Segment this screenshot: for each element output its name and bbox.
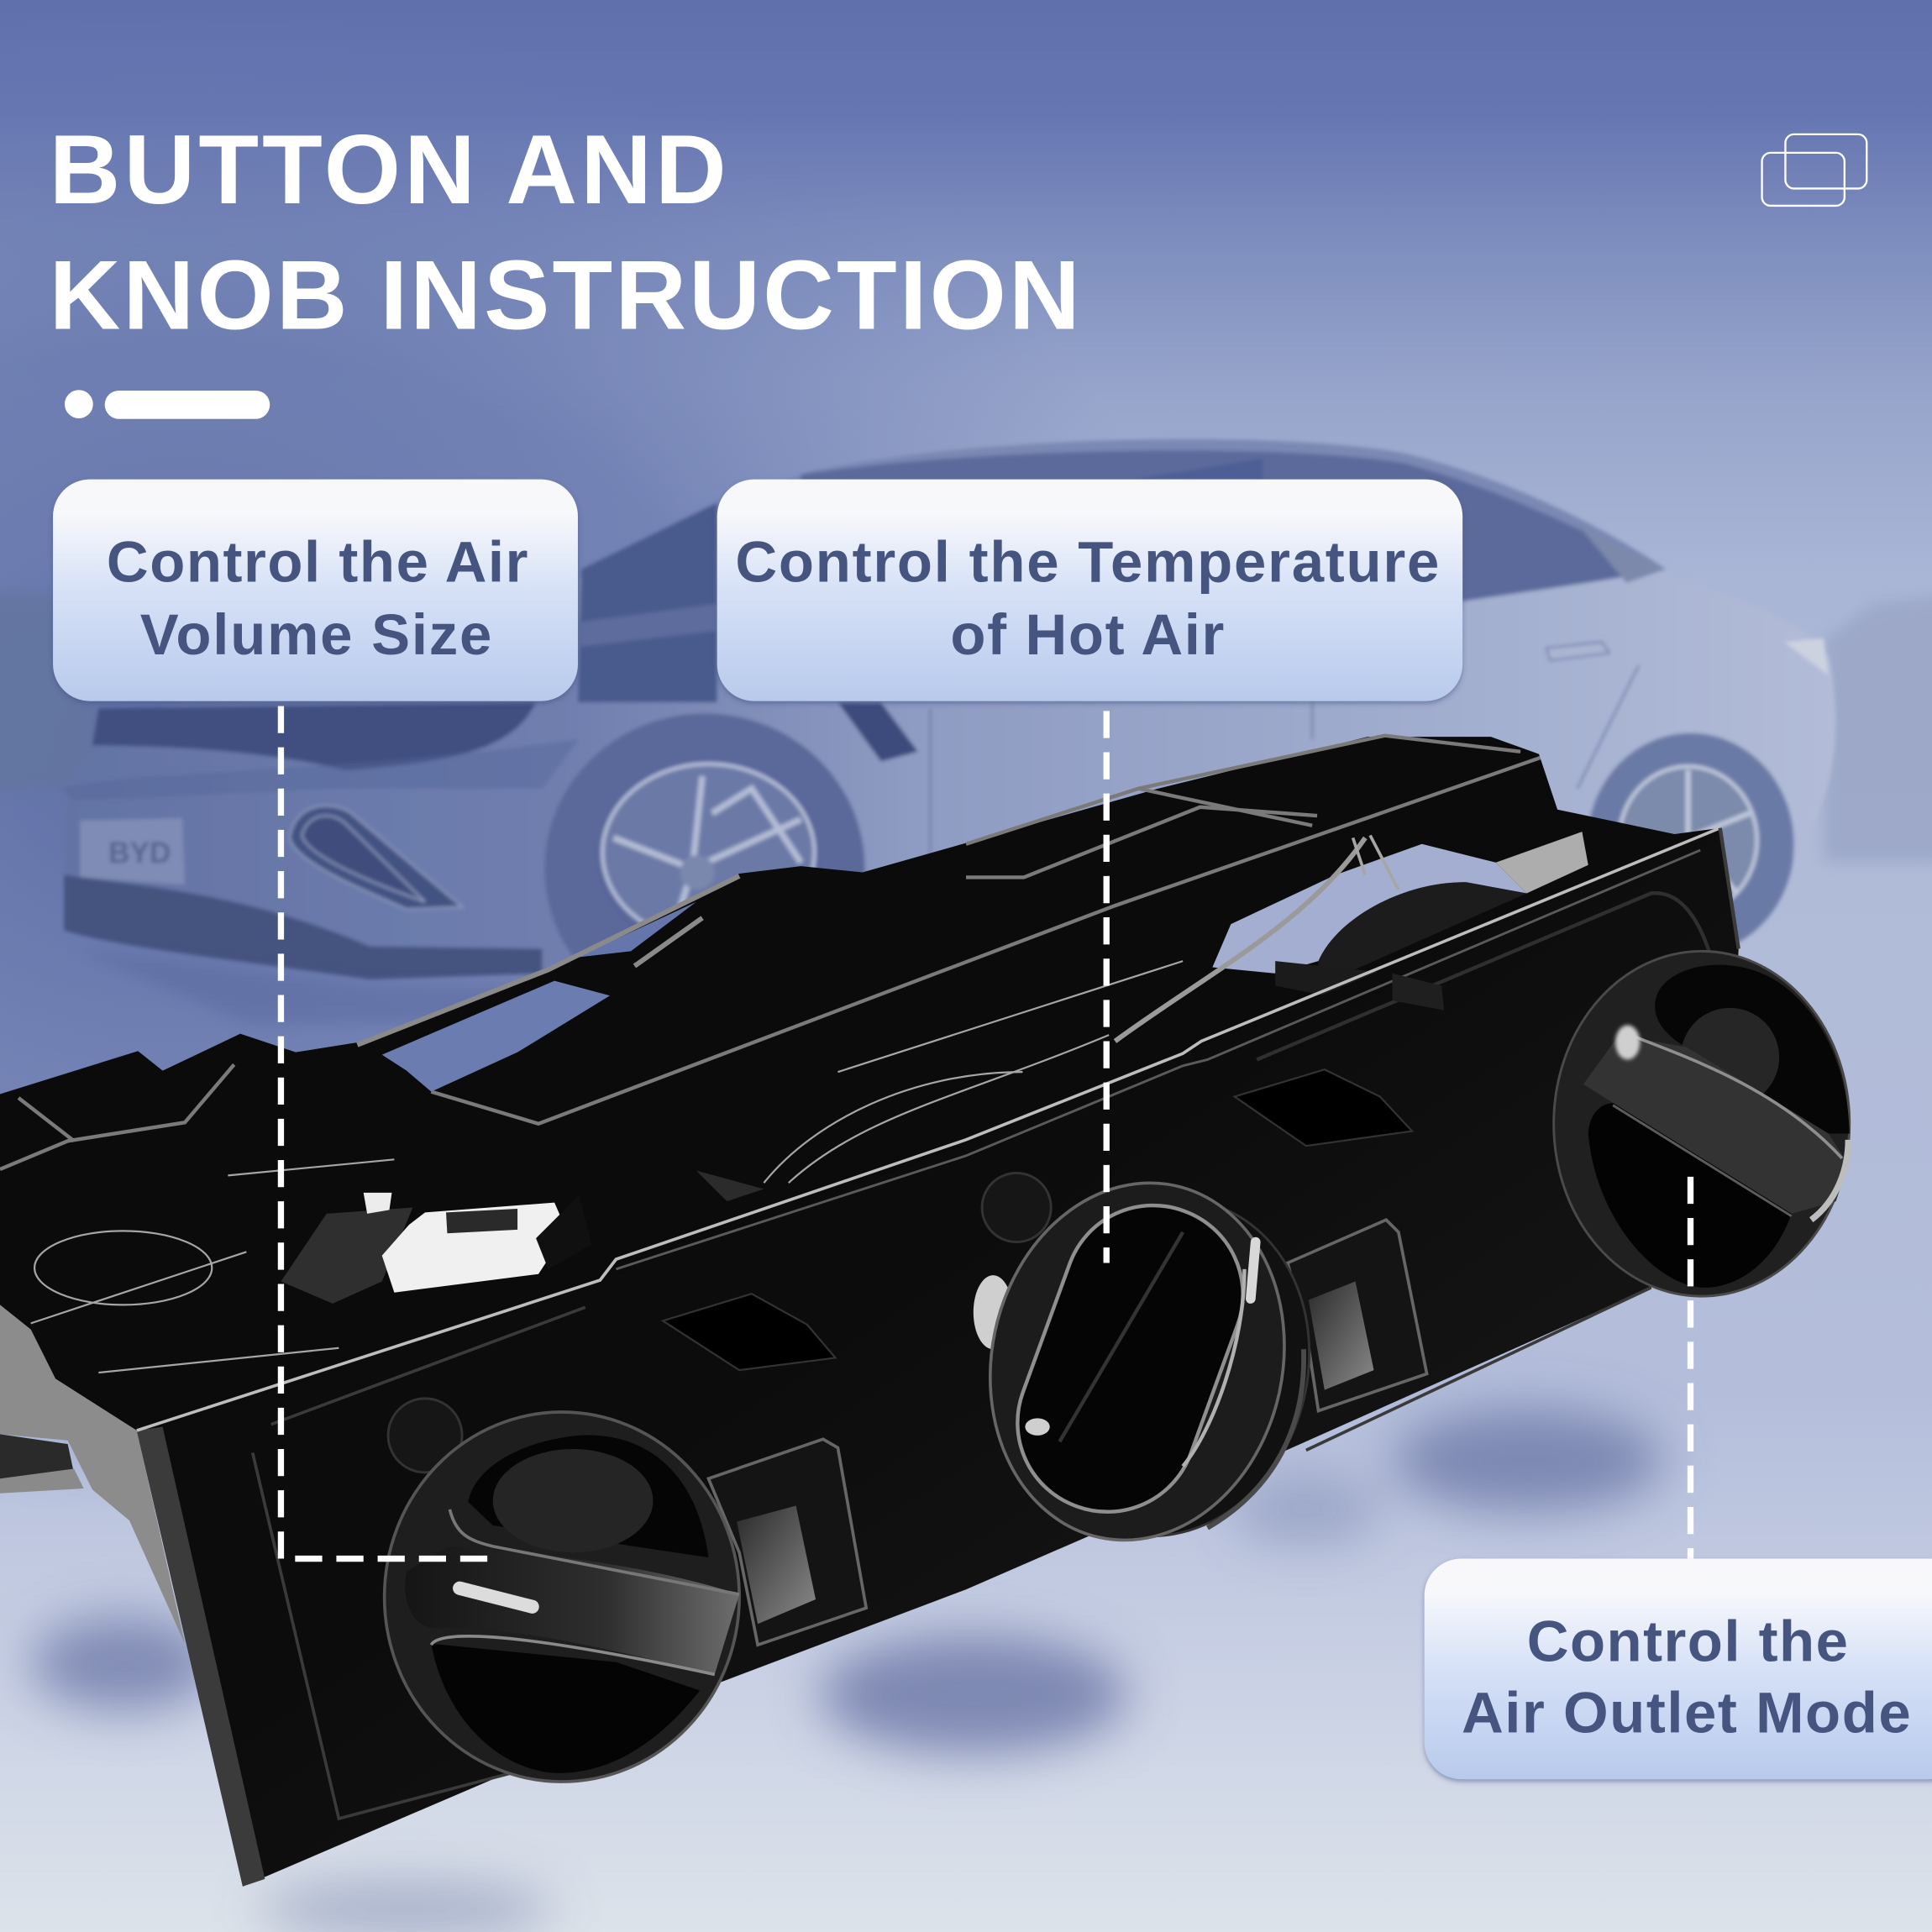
- knob posts: [388, 1399, 462, 1473]
- title: [50, 114, 1083, 350]
- knob: temperature: [958, 1155, 1347, 1569]
- knob indicator: [1251, 1242, 1256, 1299]
- rear wheel: [1587, 733, 1794, 955]
- car body: [64, 439, 1835, 974]
- callout: air volume: [53, 480, 578, 701]
- panel back tray: [0, 736, 1720, 1431]
- ground shadows: [31, 1409, 1663, 1932]
- title: KNOB INSTRUCTION: [50, 240, 1083, 350]
- car reflection: [74, 948, 616, 1022]
- front grille: [290, 806, 462, 910]
- callout: temperature: Control the Temperature: [735, 529, 1441, 594]
- lower bumper: [64, 874, 542, 979]
- tray ribs: [0, 736, 1541, 1169]
- door handle: [1546, 642, 1609, 660]
- inset border: [253, 1288, 1651, 1819]
- callout: air outlet mode: Control the: [1527, 1609, 1849, 1673]
- panel front face: [137, 828, 1739, 1887]
- windshield and roof: [579, 439, 1666, 616]
- callout: air outlet mode: Air Outlet Mode: [1462, 1680, 1912, 1745]
- title accent: dot and bar: [65, 390, 270, 419]
- side vent: [837, 702, 918, 762]
- tray parts: [1275, 961, 1448, 1016]
- motor: [281, 1193, 591, 1304]
- tray openings: [382, 981, 610, 1092]
- callout: temperature: [717, 480, 1462, 701]
- dashed leader: temperature: [1105, 711, 1109, 1263]
- knob: air outlet mode: [1554, 951, 1850, 1296]
- license plate: [80, 818, 185, 885]
- callout: air outlet mode: [1425, 1559, 1932, 1779]
- title: BUTTON AND: [50, 114, 730, 224]
- callout: air volume: Volume Size: [140, 602, 493, 667]
- callout: temperature: of Hot Air: [950, 602, 1226, 667]
- knob indicator: [459, 1588, 533, 1607]
- front wheel: [544, 713, 865, 1024]
- background car photo: [61, 439, 1835, 1024]
- dashed leader: air volume: [281, 706, 496, 1559]
- product: climate control panel: [0, 736, 1850, 1887]
- tail lamp: [1784, 638, 1829, 675]
- slider frames: [708, 1439, 866, 1645]
- callout: air volume: Control the Air: [107, 529, 529, 594]
- dashed leader: air outlet mode: [1688, 1177, 1693, 1559]
- headlight: [92, 702, 536, 770]
- knob: air volume: [385, 1412, 739, 1782]
- gray side wall: [0, 1305, 185, 1644]
- gray flap: [1496, 832, 1588, 893]
- icon: overlapping rectangles: [1762, 134, 1866, 206]
- license plate: BYD: [108, 837, 171, 869]
- direction tabs: [663, 1294, 836, 1370]
